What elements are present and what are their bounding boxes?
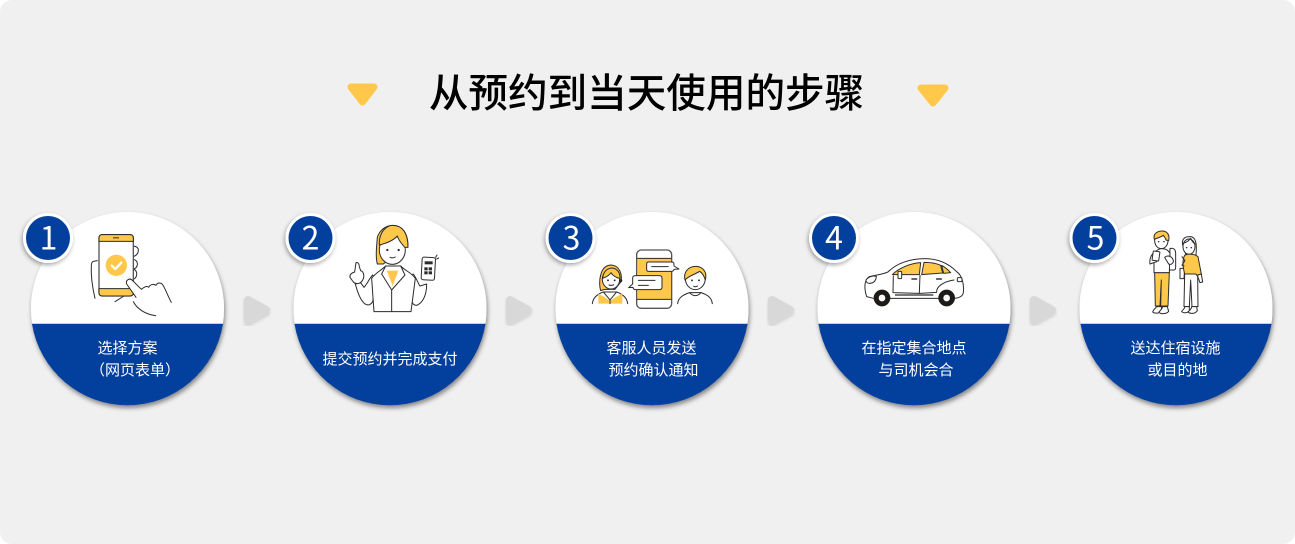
step 5 text: 或目的地 bbox=[1148, 362, 1208, 379]
step 2 number badge bbox=[286, 213, 336, 263]
step 5 circle bbox=[1080, 212, 1272, 405]
step 1 number badge bbox=[23, 213, 73, 263]
icon: woman holding phone with QR code bbox=[350, 225, 439, 312]
arrow 3 bbox=[772, 300, 790, 320]
step 4 blue label area bbox=[819, 324, 1009, 405]
title: 从预约到当天使用的步骤 bbox=[429, 72, 864, 116]
step 3 blue label area bbox=[557, 324, 747, 405]
icon: phone with check mark bbox=[91, 235, 171, 316]
step 2 circle bbox=[294, 212, 486, 405]
step 2 text: 提交预约并完成支付 bbox=[322, 350, 458, 368]
step 5 blue label area bbox=[1081, 324, 1271, 405]
step 3 number badge bbox=[546, 213, 596, 263]
step 4 text: 在指定集合地点 bbox=[862, 340, 967, 357]
panel: step 2 bbox=[286, 212, 486, 405]
step 2 number badge: 2 bbox=[302, 214, 319, 260]
step 1 text: （网页表单） bbox=[90, 362, 180, 379]
panel: step 4 bbox=[809, 212, 1010, 405]
step 2 blue label area bbox=[295, 324, 485, 405]
arrow 1 bbox=[248, 300, 266, 320]
step 1 blue label area bbox=[32, 324, 223, 405]
arrow 4 bbox=[1034, 300, 1052, 320]
step 4 number badge bbox=[809, 213, 859, 263]
panel: step 3 bbox=[546, 212, 748, 405]
icon: customer service chat bbox=[592, 250, 712, 308]
step 4 circle bbox=[818, 212, 1010, 405]
step 1 number badge: 1 bbox=[40, 214, 57, 260]
step 3 text: 预约确认通知 bbox=[608, 362, 699, 379]
step 3 text: 客服人员发送 bbox=[606, 340, 697, 357]
panel: step 1 bbox=[23, 212, 224, 405]
icon: right title marker bbox=[921, 88, 945, 103]
panel: step 5 bbox=[1070, 212, 1272, 405]
icon: two travellers bbox=[1150, 231, 1203, 314]
icon: left title marker bbox=[351, 87, 374, 102]
step 4 text: 与司机会合 bbox=[878, 362, 954, 379]
step 3 circle bbox=[556, 212, 748, 405]
step 5 number badge: 5 bbox=[1087, 214, 1104, 260]
step 1 text: 选择方案 bbox=[98, 339, 158, 357]
icon: car bbox=[865, 259, 964, 306]
step 1 circle bbox=[31, 212, 224, 405]
step 4 number badge: 4 bbox=[825, 214, 843, 260]
step 5 text: 送达住宿设施 bbox=[1130, 340, 1221, 357]
arrow 2 bbox=[510, 300, 528, 320]
step 3 number badge: 3 bbox=[563, 214, 580, 260]
step 5 number badge bbox=[1070, 213, 1120, 263]
